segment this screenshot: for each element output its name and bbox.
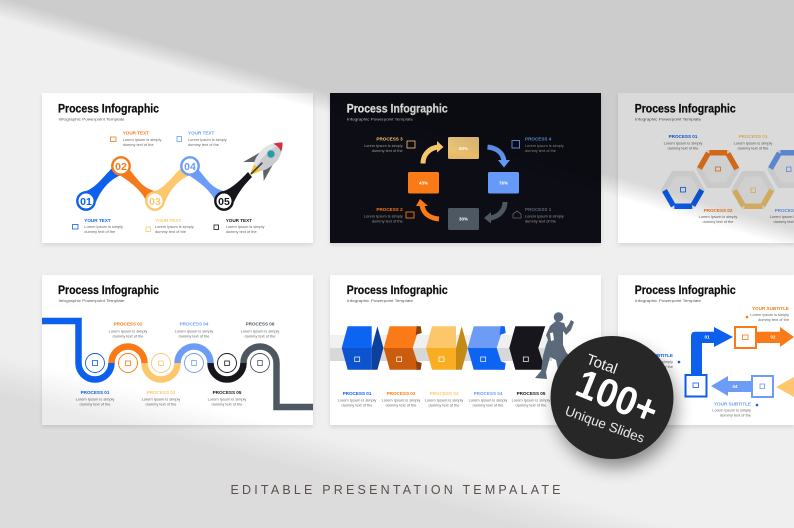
badge text: total: Total	[584, 351, 620, 378]
icon: runner silhouette	[535, 312, 575, 379]
panel: slide 5 blocks and runner	[330, 275, 601, 425]
panel: slide 4 snake path	[42, 275, 313, 425]
label: process 01: dummy text of the	[80, 402, 110, 406]
badge shadow	[556, 347, 676, 467]
label: process 06: Lorem Ipsum is simply	[241, 328, 279, 334]
label: subtitle top	[746, 306, 789, 322]
label: process 02: PROCESS 02	[114, 322, 143, 327]
text: your text 01	[72, 218, 123, 234]
text: your text 03: YOUR TEXT	[155, 218, 181, 223]
slide drop shadows	[42, 95, 794, 427]
label: process 04: Lorem Ipsum is simply	[175, 328, 213, 334]
text: your text 05: dummy text of the	[226, 229, 257, 234]
label: process 4: PROCESS 4	[525, 137, 552, 142]
label: subtitle left	[656, 354, 680, 368]
slide 2 subtitle: Infographic Powerpoint Template	[347, 116, 414, 122]
label: process 03: Lorem Ipsum is simply	[425, 398, 463, 403]
hexagon chain	[664, 153, 794, 206]
text: your text 03	[146, 218, 194, 234]
text: your text 04: dummy text of the	[188, 142, 219, 147]
label: process 2	[364, 207, 414, 224]
label: process 06: dummy text of the	[245, 334, 275, 338]
block 2 orange	[384, 326, 422, 370]
label: process 2: PROCESS 2	[376, 207, 403, 212]
text: your text 01: YOUR TEXT	[84, 218, 111, 223]
step circles: 05	[218, 196, 230, 208]
yellow box: 60%	[459, 146, 468, 151]
label: process 03: dummy text of the	[738, 146, 768, 150]
arrow 01 blue	[691, 327, 733, 376]
label: process 03: PROCESS 03	[147, 390, 176, 395]
block 5 black	[509, 326, 545, 370]
label: process 03: dummy text of the	[146, 402, 176, 406]
label: process 06: PROCESS 06	[246, 322, 275, 327]
label: subtitle left: YOUR SUBTITLE	[636, 353, 673, 358]
label: subtitle bottom: YOUR SUBTITLE	[714, 402, 751, 406]
label: process 02	[699, 208, 737, 224]
label: process 01: PROCESS 01	[343, 391, 372, 396]
text: your text 05: YOUR TEXT	[226, 218, 252, 223]
grey box	[448, 208, 479, 230]
text: your text 03: dummy text of the	[155, 229, 186, 234]
yellow box	[448, 137, 479, 159]
badge text: unique slides: Unique Slides	[563, 403, 647, 446]
label: subtitle bottom: Lorem Ipsum is simply	[712, 408, 751, 412]
label: process 04	[469, 391, 507, 408]
label: process 2: dummy text of the	[372, 219, 403, 224]
text: your text 04: YOUR TEXT	[188, 131, 214, 136]
label: subtitle bottom	[712, 402, 758, 418]
text: your text 02: dummy text of the	[123, 142, 154, 147]
label: process 03: PROCESS 03	[739, 134, 768, 139]
slide 1 title: Process Infographic	[58, 104, 160, 116]
label: process 01: PROCESS 01	[81, 390, 110, 395]
footer caption: EDITABLE PRESENTATION TEMPALATE	[230, 483, 560, 497]
label: process 4	[512, 137, 564, 153]
label: process 05: dummy text of the	[212, 402, 242, 406]
slide 3 title: Process Infographic	[635, 104, 736, 116]
slide 6 subtitle: Infographic Powerpoint Template	[635, 298, 702, 303]
grey box: 30%	[459, 216, 468, 222]
arrow: grey	[484, 202, 505, 224]
label: process 3: dummy text of the	[372, 148, 403, 153]
text: your text 04: Lorem Ipsum is simply	[188, 137, 227, 142]
step circles: 01	[80, 196, 92, 208]
step circles: 04	[184, 161, 196, 173]
label: process 03	[425, 391, 463, 408]
label: process 01	[664, 134, 702, 150]
arrow: blue	[488, 147, 510, 168]
slide 4 subtitle: Infographic Powerpoint Template	[58, 298, 125, 303]
label: process 04: dummy text of the	[179, 334, 209, 338]
step nodes	[86, 354, 270, 372]
label: process 1: Lorem Ipsum is simply	[525, 214, 564, 219]
label: subtitle left: Lorem Ipsum is simply	[634, 359, 673, 364]
label: process 03: dummy text of the	[429, 403, 459, 408]
slide 5 subtitle: Infographic Powerpoint Template	[347, 298, 414, 303]
label: process 1: PROCESS 1	[525, 207, 552, 212]
arrow 04 light blue	[711, 376, 751, 396]
slide 4 title: Process Infographic	[58, 285, 160, 297]
label: process 01: dummy text of the	[668, 146, 698, 150]
label: process 02: Lorem Ipsum is simply	[109, 328, 147, 334]
text: your text 04	[177, 131, 227, 147]
label: process 01: Lorem Ipsum is simply	[338, 398, 376, 403]
label: process 3	[364, 137, 415, 153]
label: process 02: dummy text of the	[113, 334, 143, 338]
arrow 02 orange	[757, 327, 794, 347]
label: process 04: PROCESS 04	[180, 322, 209, 327]
slide 5 title: Process Infographic	[347, 285, 448, 297]
arrow: yellow	[423, 141, 444, 164]
text: your text 02	[110, 131, 161, 147]
label: process 1	[513, 207, 564, 224]
label: process 06	[241, 322, 279, 338]
text: your text 03: Lorem Ipsum is simply	[155, 224, 194, 229]
label: subtitle bottom: dummy text of the	[720, 412, 751, 418]
badge text: 100+: 100+	[570, 361, 664, 434]
orange box: 43%	[419, 180, 428, 186]
label: process 1: dummy text of the	[525, 219, 556, 224]
label: process 02	[109, 322, 147, 338]
label: process 05: PROCESS 05	[213, 390, 242, 395]
label: process 04: dummy text of the	[473, 403, 503, 408]
label: process 02: PROCESS 02	[704, 208, 733, 213]
label: process 3: PROCESS 3	[376, 137, 403, 142]
label: process 02: dummy text of the	[386, 403, 416, 408]
label: process 04: PROCESS 04	[474, 391, 503, 396]
label: subtitle top: Lorem Ipsum is simply	[750, 312, 789, 317]
label: process 05: Lorem Ipsum is simply	[512, 398, 550, 403]
label: process 05	[512, 391, 550, 408]
label: process 01: PROCESS 01	[669, 134, 698, 139]
label: process 01	[338, 391, 376, 408]
label: process 05: PROCESS 05	[517, 391, 546, 396]
blue box	[488, 172, 519, 194]
text: your text 02: YOUR TEXT	[123, 131, 149, 136]
box: orange	[735, 327, 756, 348]
label: process 4: Lorem Ipsum is simply	[525, 143, 564, 148]
label: process 01	[76, 390, 114, 406]
label: process 3: Lorem Ipsum is simply	[364, 143, 403, 148]
icon: rocket	[240, 133, 292, 185]
label: process 01: Lorem Ipsum is simply	[76, 396, 114, 402]
label: process 02: PROCESS 02	[387, 391, 416, 396]
label: process 04	[770, 208, 794, 224]
label: process 03: PROCESS 03	[430, 391, 459, 396]
label: process 03	[734, 134, 772, 150]
label: process 01: dummy text of the	[342, 403, 372, 408]
step circles: 03	[149, 196, 161, 208]
arrow 02 orange: 02	[770, 334, 776, 340]
text: your text 05	[214, 218, 264, 234]
wave connectors	[84, 167, 252, 203]
label: process 02: dummy text of the	[703, 219, 733, 224]
label: process 01: Lorem Ipsum is simply	[664, 140, 702, 146]
block 3 yellow	[426, 326, 468, 370]
panel: slide 3 hexagons	[618, 93, 794, 243]
block 4 light blue	[468, 326, 506, 370]
badge: 100+ unique slides	[550, 336, 674, 459]
arrow: orange	[416, 199, 439, 219]
label: process 03	[142, 390, 180, 406]
label: process 05: Lorem Ipsum is simply	[208, 396, 246, 402]
label: subtitle top: YOUR SUBTITLE	[752, 306, 789, 311]
slide 1 subtitle: Infographic Powerpoint Template	[58, 116, 125, 122]
panel: slide 2 dark cycle	[330, 93, 601, 243]
step circles	[77, 157, 233, 210]
label: process 05: dummy text of the	[516, 403, 546, 408]
slide 2 title: Process Infographic	[347, 104, 448, 116]
box: blue	[686, 375, 706, 396]
label: process 2: Lorem Ipsum is simply	[364, 214, 403, 219]
label: process 02	[382, 391, 420, 408]
arrow 03 yellow	[776, 377, 794, 397]
label: process 4: dummy text of the	[525, 148, 556, 153]
label: process 04	[175, 322, 213, 338]
label: subtitle top: dummy text of the	[758, 317, 789, 322]
text: your text 01: Lorem Ipsum is simply	[84, 224, 123, 229]
arrow 01 blue: 01	[704, 334, 710, 340]
block 1 blue	[342, 326, 383, 370]
box: light blue	[752, 376, 773, 397]
label: subtitle left: dummy text of the	[642, 364, 673, 369]
orange box	[408, 172, 439, 194]
panel: slide 6 arrows	[618, 275, 794, 425]
snake ribbon	[42, 321, 313, 407]
text: your text 05: Lorem Ipsum is simply	[226, 224, 264, 229]
road band	[330, 335, 552, 361]
blue box: 76%	[499, 180, 508, 186]
step circles: 02	[115, 161, 127, 173]
label: process 03: Lorem Ipsum is simply	[142, 396, 180, 402]
text: your text 02: Lorem Ipsum is simply	[123, 137, 161, 142]
slide 3 subtitle: Infographic Powerpoint Template	[635, 116, 702, 122]
arrow 04 light blue: 04	[732, 384, 738, 389]
text: your text 01: dummy text of the	[84, 229, 115, 234]
label: process 05	[208, 390, 246, 406]
label: process 02: Lorem Ipsum is simply	[382, 398, 420, 403]
label: process 04: Lorem Ipsum is simply	[469, 398, 507, 403]
label: process 02: Lorem Ipsum is simply	[699, 214, 737, 219]
label: process 03: Lorem Ipsum is simply	[734, 140, 772, 146]
slide 6 title: Process Infographic	[635, 285, 736, 297]
panel: slide 1 rocket timeline	[42, 93, 313, 243]
